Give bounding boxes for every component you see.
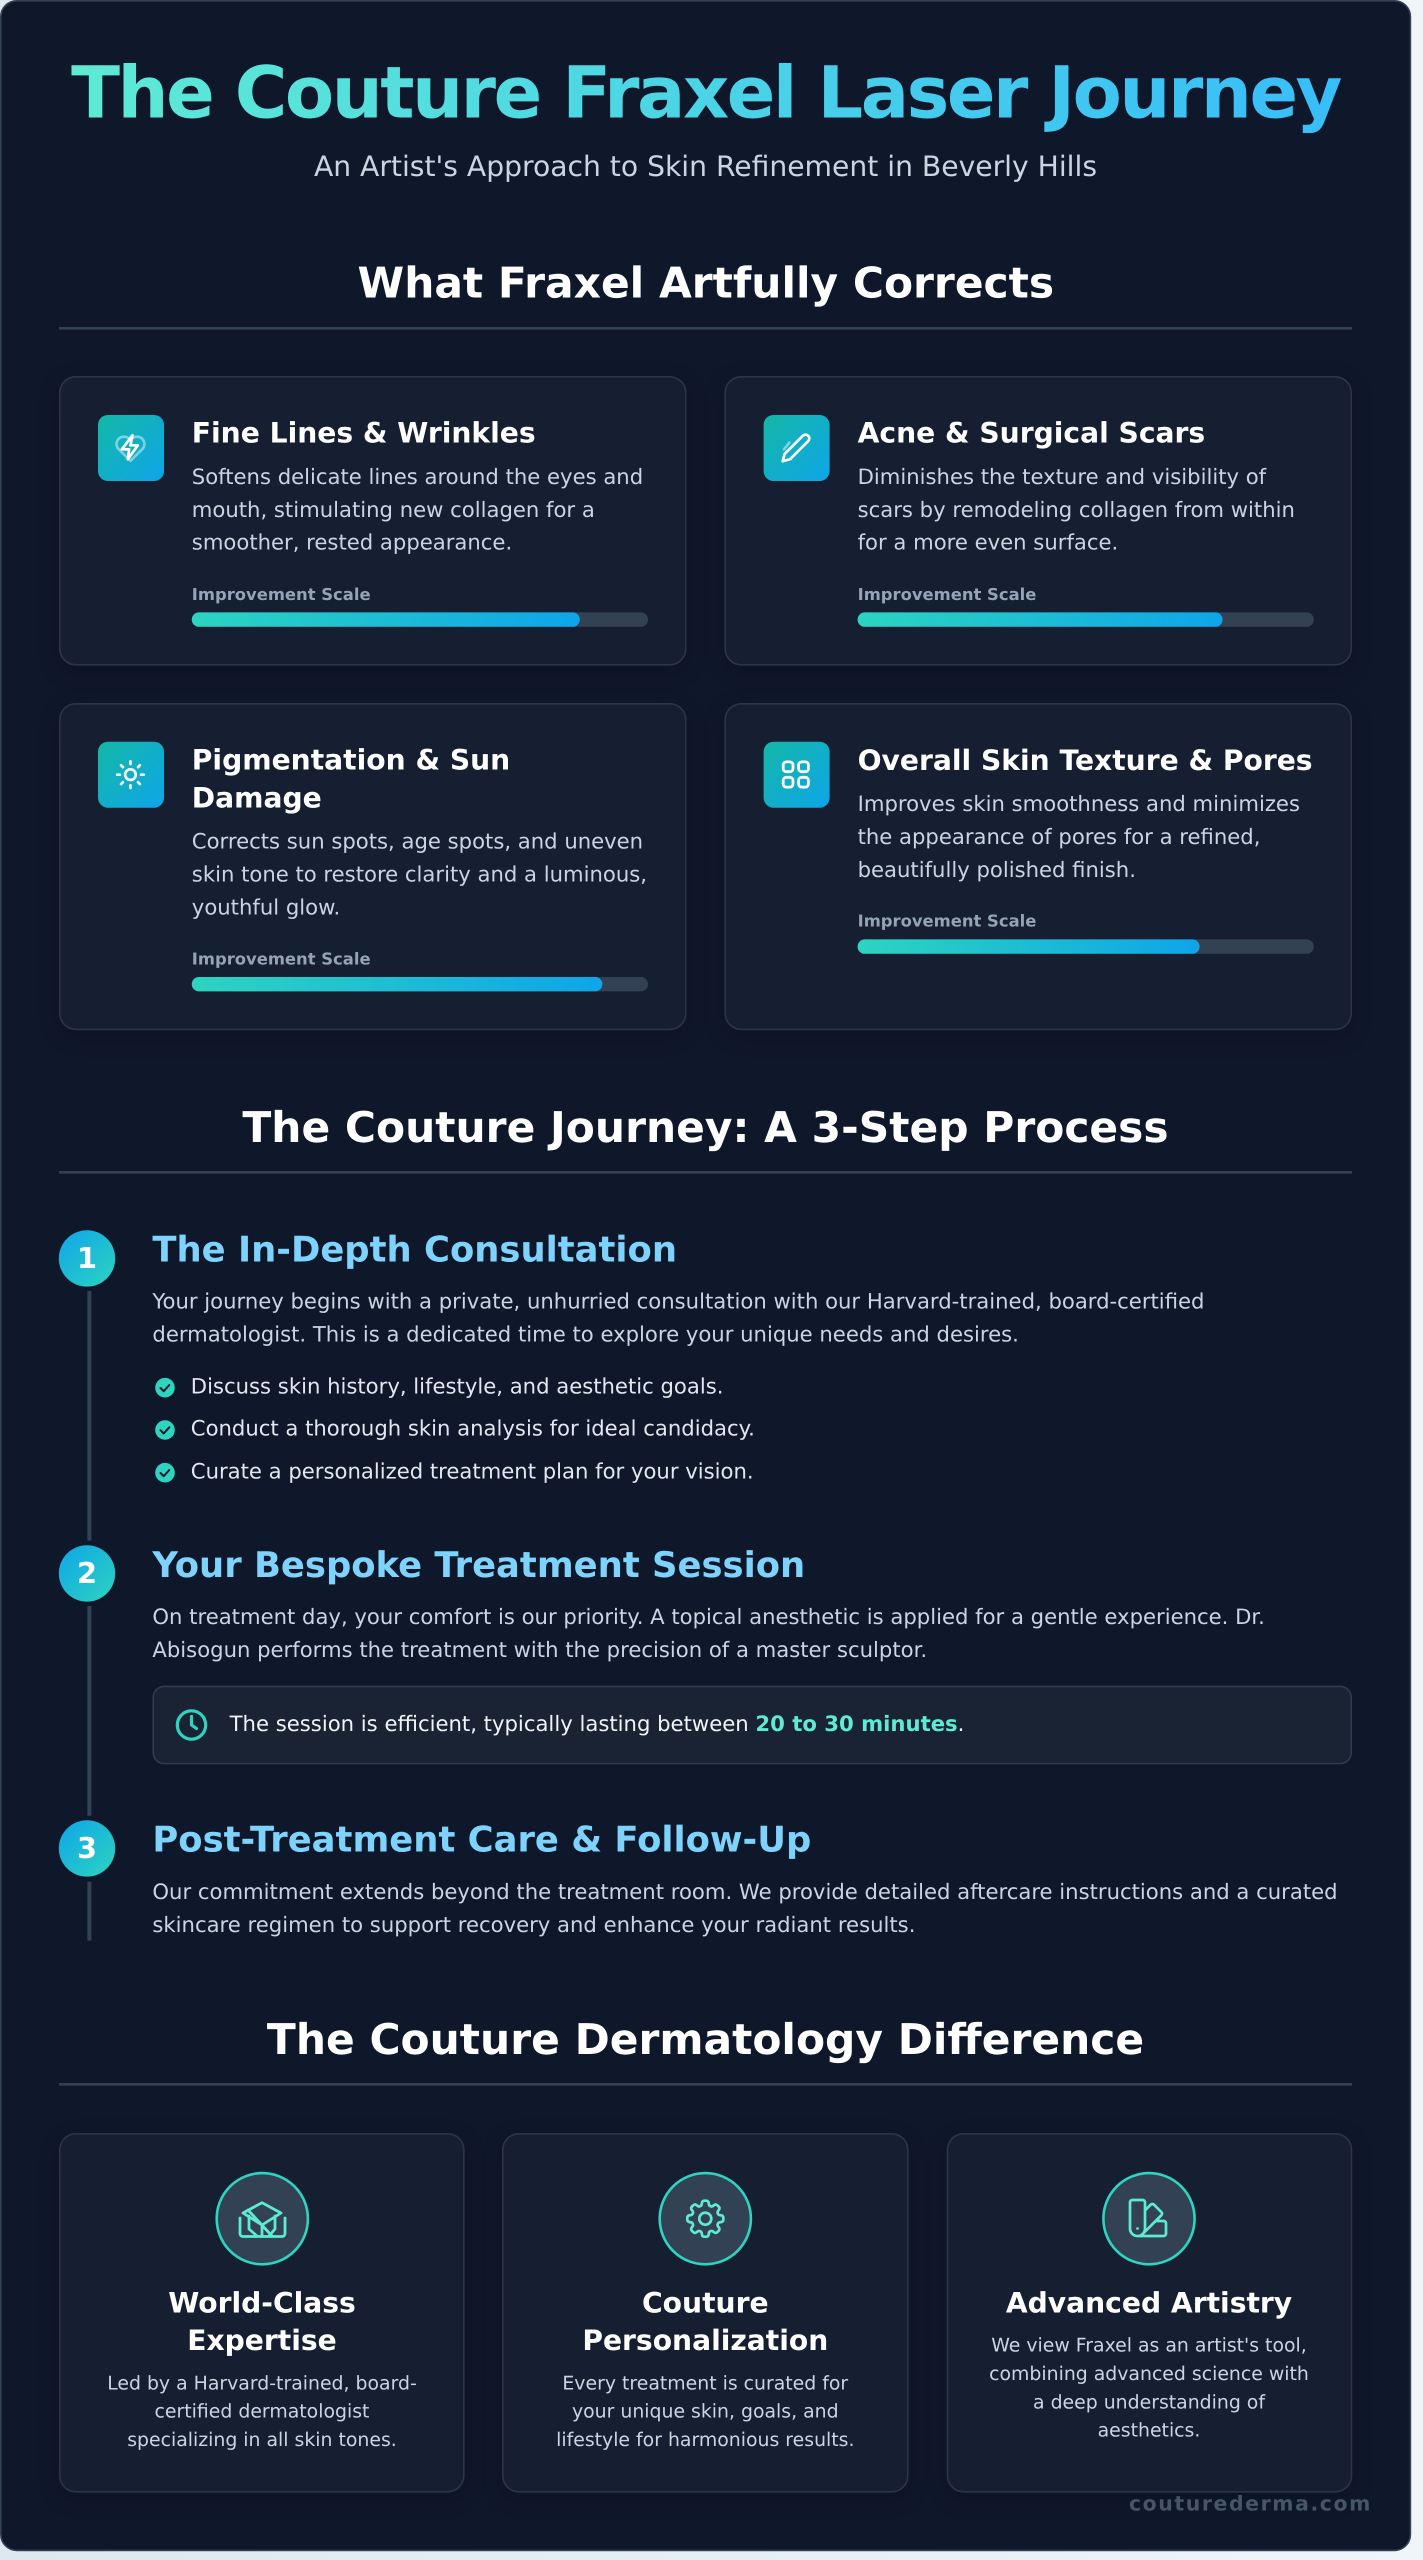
step description [151, 1288, 1204, 1346]
card description: Diminishes the texture and visibility of [858, 464, 1267, 489]
card title [192, 744, 510, 814]
subtitle: An Artist's Approach to Skin Refinement in Beverly Hills [314, 150, 1097, 183]
step description: Abisogun performs the treatment with the precision of a master sculptor. [152, 1637, 927, 1662]
timeline connector [87, 1291, 91, 1541]
heading: what Fraxel corrects: What Fraxel Artfully Corrects [357, 258, 1054, 307]
callout: session length [153, 1686, 1351, 1764]
card title: World-Class [168, 2286, 356, 2319]
card description: Led by a Harvard-trained, board- [107, 2372, 417, 2394]
card description: scars by remodeling collagen from within [858, 497, 1295, 522]
step number 2: 2 [77, 1556, 97, 1590]
card description: Corrects sun spots, age spots, and uneven [192, 829, 643, 854]
card description: combining advanced science with [989, 2363, 1309, 2385]
check item: Discuss skin history, lifestyle, and aesthetic goals. [191, 1373, 723, 1398]
step number 2 [59, 1545, 115, 1602]
timeline connector [87, 1606, 91, 1816]
card description: beautifully polished finish. [858, 857, 1136, 882]
card title: Pigmentation & Sun [192, 744, 510, 776]
step description: Your journey begins with a private, unhurried consultation with our Harvard-trained, board-certified [151, 1288, 1204, 1313]
callout text: The session is efficient, typically lasting between 20 to 30 minutes. [229, 1711, 964, 1736]
icon: swatch [1103, 2173, 1195, 2264]
card description: the appearance of pores for a refined, [858, 824, 1260, 849]
card title [582, 2286, 828, 2357]
card title: Damage [192, 781, 322, 814]
improvement scale bar: Improvement Scale [192, 585, 371, 604]
card title: Couture [642, 2286, 769, 2319]
card description: certified dermatologist [155, 2401, 369, 2423]
icon: sun [98, 742, 164, 808]
improvement scale bar: Improvement Scale [192, 949, 371, 968]
card title: Advanced Artistry [1006, 2286, 1292, 2319]
icon: pencil [764, 415, 830, 481]
icon: clock [177, 1711, 206, 1739]
heading: the difference: The Couture Dermatology Difference [267, 2015, 1144, 2064]
panel: advanced artistry [948, 2134, 1352, 2492]
step number 1 [59, 1230, 115, 1287]
step title: The In-Depth Consultation [152, 1230, 677, 1270]
checklist [155, 1373, 755, 1483]
panel: fine lines and wrinkles [60, 377, 686, 665]
step title: Your Bespoke Treatment Session [151, 1545, 805, 1586]
improvement scale bar: Improvement Scale [858, 585, 1036, 604]
step description: skincare regimen to support recovery and enhance your radiant results. [152, 1912, 915, 1937]
card description [858, 791, 1300, 882]
card description: aesthetics. [1098, 2420, 1200, 2442]
improvement scale bar [192, 585, 648, 627]
step description: dermatologist. This is a dedicated time to explore your unique needs and desires. [152, 1321, 1019, 1346]
title: The Couture Fraxel Laser Journey [71, 50, 1342, 134]
card description: a deep understanding of [1033, 2391, 1265, 2413]
improvement scale bar [192, 949, 648, 991]
panel: acne and surgical scars [725, 377, 1351, 665]
card description [556, 2372, 854, 2451]
card description [989, 2335, 1309, 2442]
panel: couture personalization [503, 2134, 908, 2492]
card description: Softens delicate lines around the eyes and [192, 464, 643, 489]
card title: Fine Lines & Wrinkles [192, 417, 536, 450]
card description: smoother, rested appearance. [192, 530, 512, 555]
card description: youthful glow. [192, 895, 340, 920]
step number 1: 1 [77, 1241, 97, 1275]
card description: for a more even surface. [858, 530, 1118, 555]
check item: Conduct a thorough skin analysis for ideal candidacy. [191, 1416, 755, 1441]
step description: On treatment day, your comfort is our priority. A topical anesthetic is applied for a gentle experience. Dr. [152, 1604, 1265, 1629]
step 1 [59, 1230, 1204, 1541]
card description: your unique skin, goals, and [572, 2401, 839, 2423]
card description: skin tone to restore clarity and a luminous, [192, 862, 647, 887]
card title: Expertise [187, 2324, 337, 2357]
step number 3: 3 [77, 1831, 97, 1865]
step description [152, 1604, 1265, 1662]
card description [192, 464, 643, 555]
panel: overall skin texture and pores [725, 704, 1351, 1029]
card title: Acne & Surgical Scars [858, 417, 1205, 450]
card title: Personalization [582, 2324, 828, 2357]
improvement scale bar [858, 912, 1314, 954]
card description: lifestyle for harmonious results. [556, 2429, 854, 2451]
card description: Every treatment is curated for [562, 2372, 848, 2394]
card description: Improves skin smoothness and minimizes [858, 791, 1300, 816]
check item: Curate a personalized treatment plan for your vision. [191, 1458, 754, 1483]
watermark: couturederma.com [1129, 2492, 1372, 2516]
icon: heart bolt [98, 415, 164, 481]
card description [107, 2372, 417, 2451]
panel: world-class expertise [60, 2134, 464, 2492]
step title: Post-Treatment Care & Follow-Up [152, 1820, 811, 1860]
card title [168, 2286, 356, 2357]
timeline connector [87, 1882, 91, 1941]
step number 3 [59, 1820, 115, 1877]
icon: grid [764, 742, 830, 808]
improvement scale bar [858, 585, 1314, 627]
improvement scale bar: Improvement Scale [858, 912, 1036, 931]
step description [152, 1879, 1338, 1937]
step description: Our commitment extends beyond the treatment room. We provide detailed aftercare instructions and a curated [152, 1879, 1338, 1904]
heading: the journey: The Couture Journey: A 3-Step Process [242, 1103, 1169, 1152]
icon: graduation cap [217, 2173, 308, 2264]
card description [192, 829, 647, 920]
card description: specializing in all skin tones. [127, 2429, 397, 2451]
card description: mouth, stimulating new collagen for a [192, 497, 595, 522]
icon: gear [660, 2173, 751, 2264]
panel: pigmentation and sun damage [60, 704, 686, 1029]
card description: We view Fraxel as an artist's tool, [991, 2335, 1307, 2357]
card description [858, 464, 1295, 555]
step 3 [59, 1820, 1338, 1941]
card title: Overall Skin Texture & Pores [858, 744, 1313, 777]
step 2 [59, 1545, 1351, 1816]
